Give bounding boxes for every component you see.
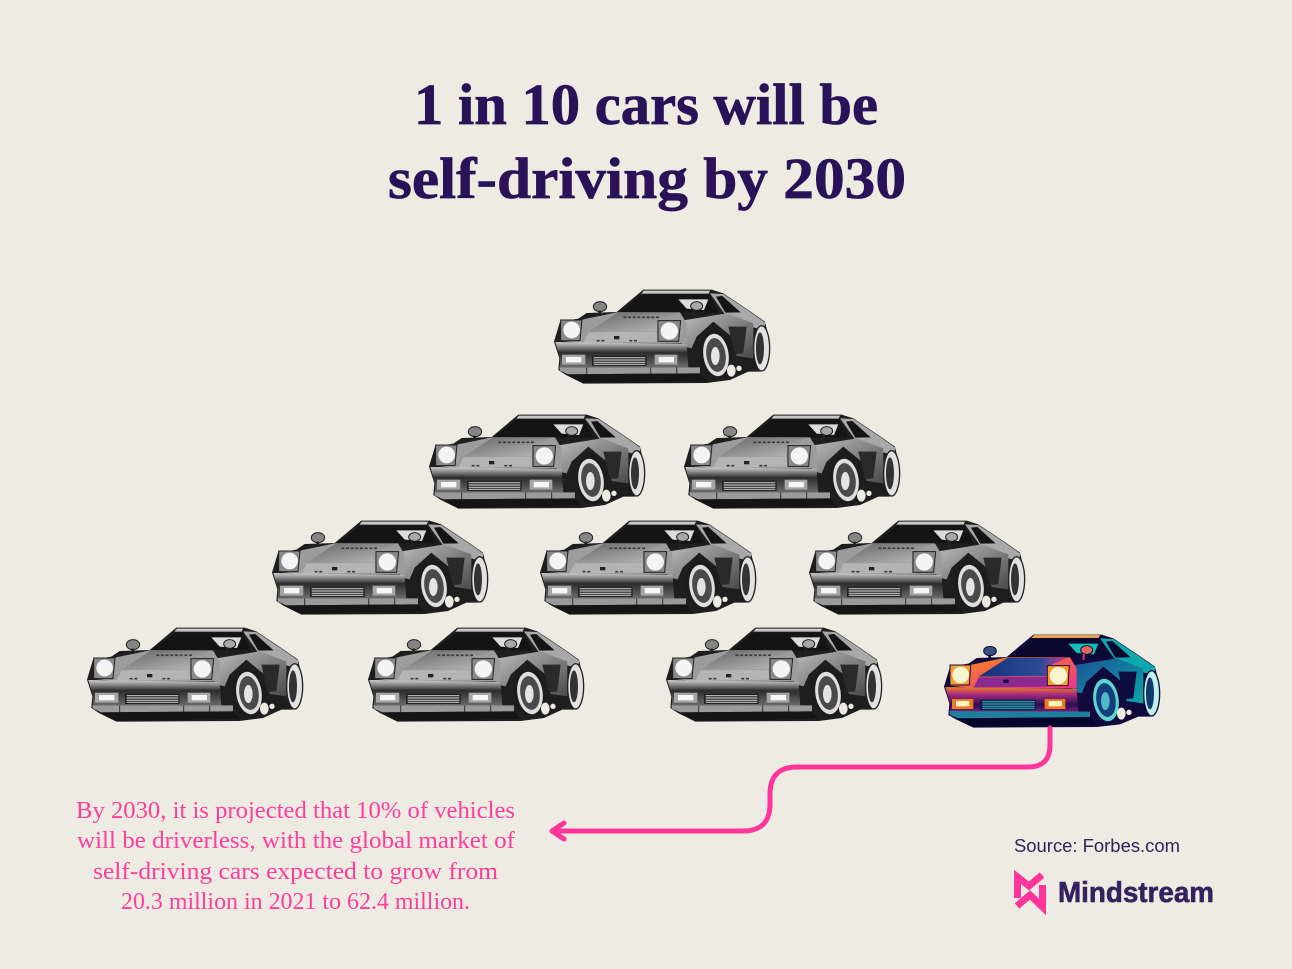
car row 2, car 2 — [684, 415, 900, 509]
icon: Mindstream logo mark — [1017, 875, 1042, 907]
car row 3, car 1 — [272, 521, 488, 615]
arrow from colour car to caption — [552, 728, 1050, 839]
caption text: By 2030, it is projected that 10% of vehicles — [76, 798, 515, 824]
car row 3, car 2 — [540, 521, 756, 615]
car row 3, car 3 — [809, 521, 1025, 615]
title: 1 in 10 cars will be — [414, 72, 878, 137]
source note: Source: Forbes.com — [1014, 835, 1180, 856]
highlighted colour car — [944, 635, 1160, 728]
caption text: 20.3 million in 2021 to 62.4 million. — [121, 889, 470, 915]
title — [388, 72, 906, 211]
car row 4, car 2 — [368, 628, 584, 722]
caption text — [76, 798, 515, 915]
caption text: self-driving cars expected to grow from — [93, 859, 498, 885]
car row 1, car 1 — [554, 290, 770, 384]
brand name: Mindstream — [1058, 877, 1214, 909]
caption text: will be driverless, with the global market of — [77, 828, 515, 854]
car row 4, car 1 — [87, 628, 303, 722]
car row 4, car 3 — [666, 628, 882, 722]
title: self-driving by 2030 — [388, 146, 906, 211]
car row 2, car 1 — [429, 415, 645, 509]
car grid: ten cars — [87, 290, 1160, 728]
